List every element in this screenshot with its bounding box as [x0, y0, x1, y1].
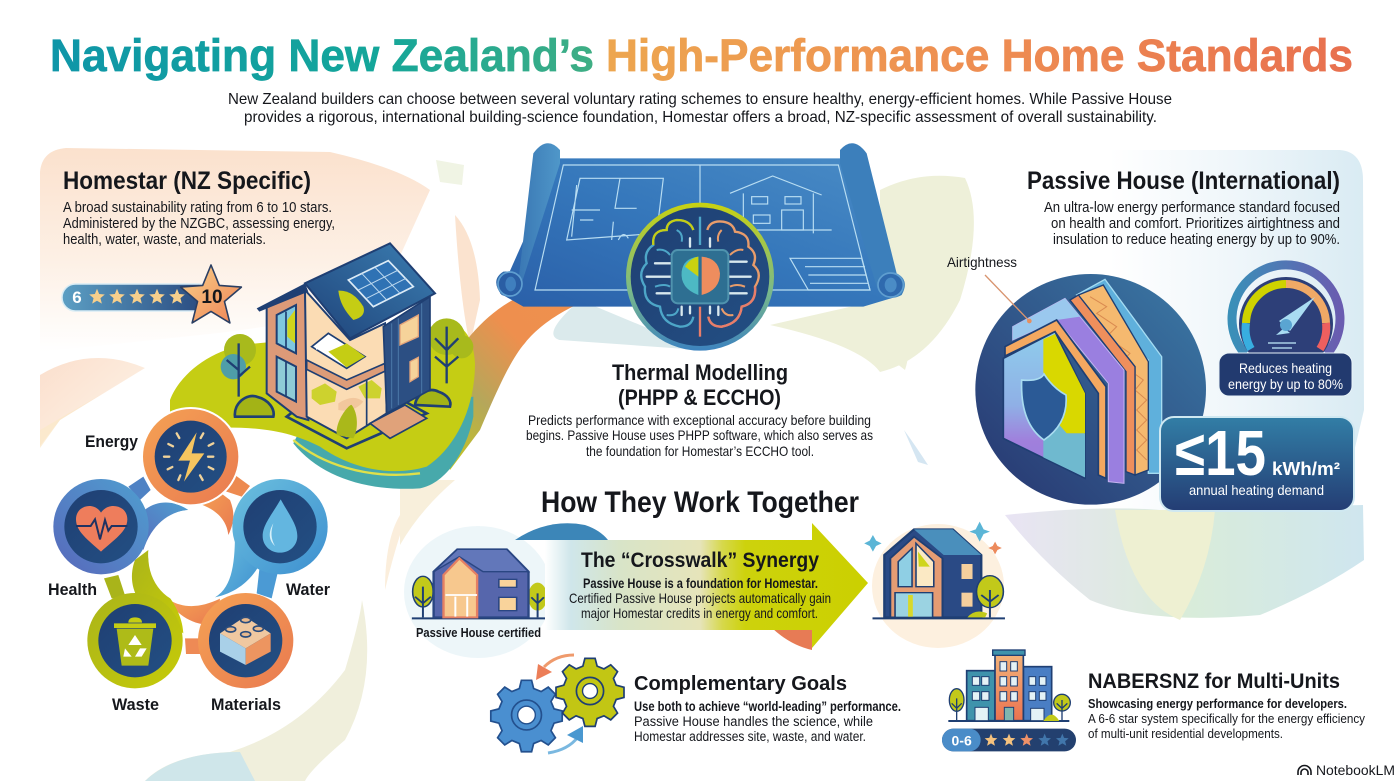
chip	[672, 250, 728, 303]
rating pill 6 to 10 stars: 6	[72, 288, 82, 307]
blue gear	[491, 680, 562, 752]
shield	[1022, 374, 1066, 440]
category labels: Energy	[85, 432, 138, 451]
text: Thermal Modelling description	[526, 412, 873, 459]
rating pill 6 to 10 stars: 10	[201, 287, 223, 308]
category labels: Waste	[112, 695, 159, 714]
text: Homestar description: A broad sustainability rating from 6 to 10 stars.	[63, 199, 332, 216]
heating demand stat box: ≤15	[1175, 417, 1266, 489]
gauge dial	[1232, 265, 1340, 371]
heading: Homestar: Homestar (NZ Specific)	[63, 167, 311, 195]
description: Use both to achieve “world-leading” performance.	[634, 699, 901, 714]
heating demand stat box: annual heating demand	[1189, 482, 1324, 498]
title: High-Performance Home Standards: High-Performance Home Standards	[606, 30, 1353, 81]
description: Passive House handles the science, while	[634, 714, 873, 729]
rating pill 6 to 10 stars	[62, 265, 241, 323]
heading: NABERSNZ for Multi-Units	[1088, 669, 1340, 693]
roof with solar panel	[305, 243, 435, 338]
wooden deck	[370, 405, 427, 438]
bed	[312, 333, 365, 368]
heading: How They Work Together: How They Work Together	[541, 486, 859, 519]
gauge caption box: Reduces heating	[1239, 360, 1332, 376]
gauge	[1219, 265, 1352, 396]
text: Homestar description: health, water, waste, and materials.	[63, 231, 266, 248]
trees and bushes	[221, 318, 473, 417]
heating demand stat box: kWh/m²	[1272, 459, 1340, 479]
right circuit brain	[707, 221, 759, 327]
category labels: Health	[48, 580, 97, 599]
category labels	[48, 432, 330, 714]
icon: multi-unit buildings with rating	[942, 650, 1076, 751]
illustration: sustainable house on green land	[170, 243, 475, 489]
circuit traces	[696, 217, 703, 245]
description: of multi-unit residential developments.	[1088, 726, 1283, 741]
text: Crosswalk description: Certified Passive House projects automatically gain	[569, 590, 831, 606]
text: Passive House description: on health and comfort. Prioritizes airtightness and	[1051, 215, 1340, 232]
heading: Thermal Modelling: Thermal Modelling	[612, 360, 788, 385]
icon: water drop	[232, 479, 328, 574]
Crosswalk arrow	[515, 523, 868, 650]
orange middle layer	[1005, 320, 1106, 478]
glow	[872, 524, 1004, 648]
text: Thermal Modelling description: Predicts performance with exceptional accuracy before building	[528, 412, 871, 428]
intro paragraph	[228, 91, 1172, 126]
lower room furniture	[312, 383, 337, 405]
intro paragraph: New Zealand builders can choose between several voluntary rating schemes to ensure healthy, energy-efficient homes. While Passive House	[228, 91, 1172, 108]
text: Crosswalk description: major Homestar credits in energy and comfort.	[581, 605, 818, 621]
icon: energy bolt	[142, 408, 239, 505]
sparkles	[969, 522, 990, 542]
green land	[170, 324, 475, 471]
insulation layer	[1078, 285, 1148, 475]
caption: Passive House certified	[416, 625, 541, 640]
heading: Passive House: Passive House (International)	[1027, 167, 1340, 195]
icon: brain and chip	[626, 203, 774, 351]
text: Passive House description	[1044, 199, 1340, 248]
icon: waste bin	[87, 593, 183, 688]
text: Thermal Modelling description: the foundation for Homestar’s ECCHO tool.	[586, 443, 814, 459]
icon: materials block	[198, 593, 293, 688]
arrow body	[545, 523, 868, 648]
text: Crosswalk description: Passive House is a foundation for Homestar.	[583, 575, 818, 591]
glow	[404, 526, 552, 658]
floor slab	[307, 360, 386, 389]
category labels: Materials	[211, 695, 281, 714]
heating demand stat box	[1160, 417, 1354, 511]
text: Passive House description: insulation to reduce heating energy by up to 90%.	[1053, 231, 1340, 248]
mini brain	[682, 257, 698, 295]
house base	[287, 393, 427, 448]
left circuit brain	[641, 220, 693, 327]
text: Homestar description	[63, 199, 335, 248]
icon: health heart	[53, 479, 149, 574]
right scroll	[840, 143, 905, 298]
title: Navigating New Zealand's: Navigating New Zealand’s	[50, 30, 594, 81]
title	[50, 30, 1353, 81]
NABERSNZ text	[1088, 669, 1365, 741]
rating pill 0-6: 0-6	[952, 732, 972, 748]
house icon	[864, 522, 1005, 618]
text: Crosswalk description	[569, 575, 831, 621]
open interior	[305, 290, 387, 438]
description	[1088, 696, 1365, 741]
teal river	[293, 397, 473, 489]
heading: Crosswalk: The “Crosswalk” Synergy	[581, 549, 819, 572]
dark right wall	[383, 297, 430, 413]
NotebookLM watermark: NotebookLM	[1316, 763, 1395, 778]
airtightness pointer	[985, 275, 1030, 322]
panel: Passive House	[1027, 167, 1340, 248]
text: Homestar description: Administered by the NZGBC, assessing energy,	[63, 215, 335, 232]
blueprint sheet	[500, 158, 897, 307]
heading: Thermal Modelling: (PHPP & ECCHO)	[618, 385, 781, 410]
label: Airtightness: Airtightness	[947, 254, 1017, 270]
brain badge	[626, 203, 774, 351]
description: A 6-6 star system specifically for the energy efficiency	[1088, 711, 1365, 726]
Thermal Modelling block	[526, 360, 873, 459]
house icon	[412, 549, 549, 618]
buildings	[948, 650, 1070, 721]
orange layer	[1070, 295, 1135, 475]
category labels: Water	[286, 580, 330, 599]
description: Homestar addresses site, waste, and water.	[634, 729, 866, 744]
gauge caption box	[1219, 353, 1352, 396]
left facade	[267, 290, 308, 420]
lime gear	[556, 658, 624, 726]
Homestar rated house	[864, 522, 1005, 648]
arrow decorative arcs	[515, 523, 608, 540]
five categories ring	[53, 408, 328, 688]
text: Thermal Modelling description: begins. Passive House uses PHPP software, which also serves as	[526, 427, 873, 443]
panel: Homestar	[62, 167, 335, 323]
outer blue layer	[1077, 279, 1162, 473]
text: Passive House description: An ultra-low energy performance standard focused	[1044, 199, 1340, 216]
description: Showcasing energy performance for developers.	[1088, 696, 1347, 711]
navy circle	[975, 274, 1206, 505]
cycle arrows	[544, 655, 574, 667]
illustration: wall layers	[975, 274, 1206, 505]
intro paragraph: provides a rigorous, international building-science foundation, Homestar offers a broad, NZ-specific assessment of overall sustainability.	[244, 109, 1157, 126]
heading: Thermal Modelling	[612, 360, 788, 410]
heading: Complementary Goals	[634, 672, 847, 695]
background washes	[40, 148, 1364, 781]
orange-to-lime connecting swoosh	[430, 267, 625, 470]
front panel	[1003, 332, 1085, 478]
Passive House certified house	[404, 526, 552, 658]
left scroll	[496, 143, 560, 296]
icon: gears	[491, 655, 624, 753]
centre white space	[148, 510, 232, 604]
gauge caption box: energy by up to 80%	[1228, 376, 1343, 392]
blueprint illustration	[496, 143, 905, 307]
description	[634, 699, 901, 744]
plan linework	[535, 165, 870, 290]
Complementary Goals text	[634, 672, 901, 744]
purple airtight layer	[1013, 298, 1124, 483]
connector tails	[104, 475, 278, 654]
